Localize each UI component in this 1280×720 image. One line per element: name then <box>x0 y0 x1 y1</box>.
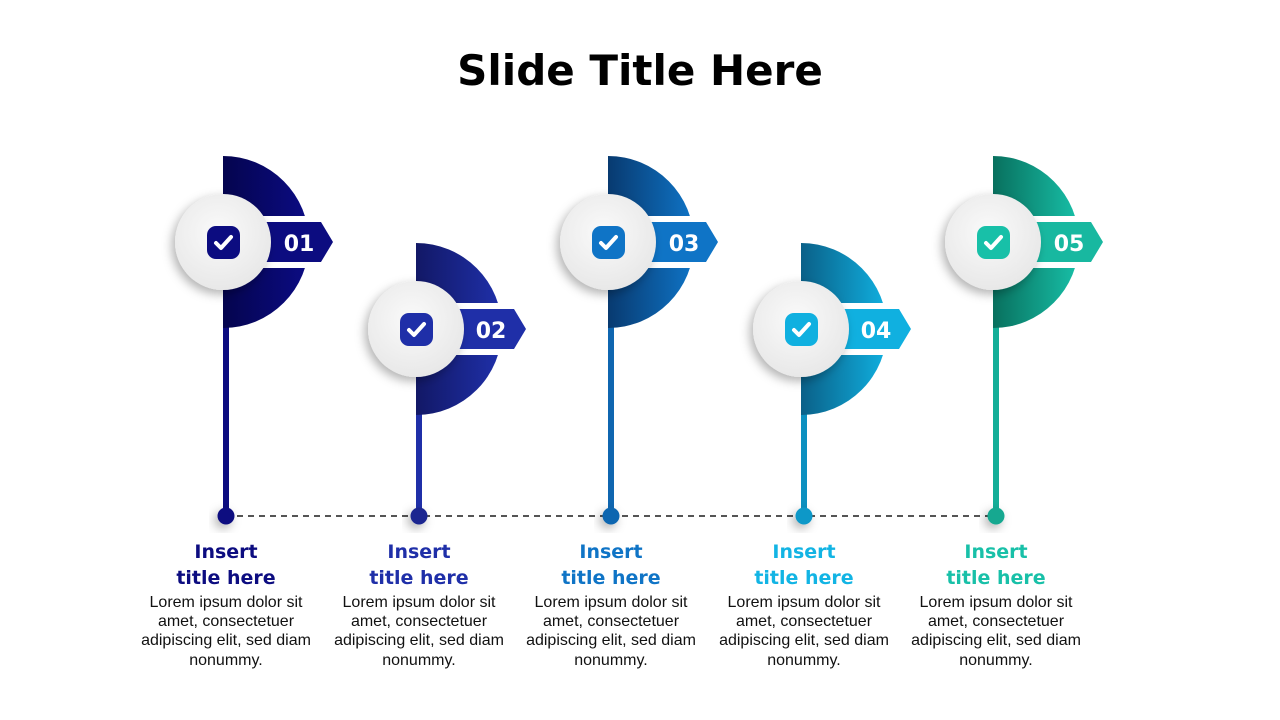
step 04 <box>753 243 911 524</box>
text block 1: amet, consectetuer <box>158 613 295 630</box>
text block 4: adipiscing elit, sed diam <box>719 632 889 649</box>
step 03 <box>560 156 718 524</box>
text block 1 <box>141 541 311 669</box>
text block 1: adipiscing elit, sed diam <box>141 632 311 649</box>
text block 2: adipiscing elit, sed diam <box>334 632 504 649</box>
dotted timeline <box>226 515 996 517</box>
text block 3: title here <box>561 567 661 589</box>
text block 3: adipiscing elit, sed diam <box>526 632 696 649</box>
text block 1: Insert <box>194 541 258 563</box>
text block 3: amet, consectetuer <box>543 613 680 630</box>
step 01 <box>175 156 333 524</box>
step 03: 03 <box>669 232 699 257</box>
text block 4: amet, consectetuer <box>736 613 873 630</box>
text block 1: title here <box>176 567 276 589</box>
text block 3: Insert <box>579 541 643 563</box>
text block 2 <box>334 541 504 669</box>
text block 5 <box>911 541 1081 669</box>
title: Slide Title Here <box>457 46 823 95</box>
step 01: 01 <box>284 232 314 257</box>
text block 2: nonummy. <box>382 652 456 669</box>
text block 4: Insert <box>772 541 836 563</box>
text block 4: Lorem ipsum dolor sit <box>728 594 881 611</box>
text block 4: nonummy. <box>767 652 841 669</box>
text block 4 <box>719 541 889 669</box>
text block 3: Lorem ipsum dolor sit <box>535 594 688 611</box>
step 04: 04 <box>861 319 891 344</box>
text block 2: title here <box>369 567 469 589</box>
text block 5: nonummy. <box>959 652 1033 669</box>
text block 5: Insert <box>964 541 1028 563</box>
step 02: 02 <box>476 319 506 344</box>
text block 2: Insert <box>387 541 451 563</box>
step 02 <box>368 243 526 524</box>
text block 1: Lorem ipsum dolor sit <box>150 594 303 611</box>
text block 5: amet, consectetuer <box>928 613 1065 630</box>
text block 2: amet, consectetuer <box>351 613 488 630</box>
step 05: 05 <box>1054 232 1084 257</box>
text block 3: nonummy. <box>574 652 648 669</box>
text block 5: adipiscing elit, sed diam <box>911 632 1081 649</box>
text block 3 <box>526 541 696 669</box>
text block 2: Lorem ipsum dolor sit <box>343 594 496 611</box>
text block 5: title here <box>946 567 1046 589</box>
text block 5: Lorem ipsum dolor sit <box>920 594 1073 611</box>
text block 4: title here <box>754 567 854 589</box>
text block 1: nonummy. <box>189 652 263 669</box>
step 05 <box>945 156 1103 524</box>
